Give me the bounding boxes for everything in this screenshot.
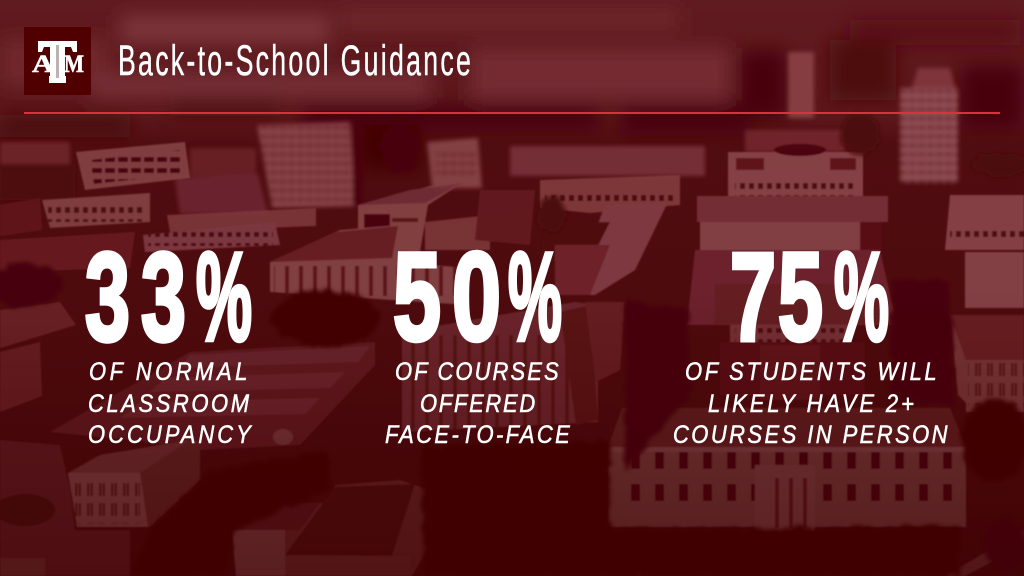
top centre campus hall bbox=[728, 152, 863, 198]
stat: 75 percent of students will likely have 2+ courses in person: % bbox=[834, 228, 889, 367]
caption bbox=[88, 358, 253, 448]
big number 33%: 3 bbox=[85, 228, 130, 367]
logo letter M: M bbox=[64, 51, 84, 78]
big number 33%: 3 bbox=[141, 228, 186, 367]
big number 75% bbox=[730, 228, 889, 367]
caption: OFFERED bbox=[420, 390, 535, 417]
distant blurred skyline bbox=[0, 8, 1024, 170]
logo T mark bbox=[38, 41, 77, 83]
lower central building bbox=[232, 480, 430, 576]
central-left blocks bbox=[358, 183, 462, 252]
stat: 33 percent of normal classroom occupancy bbox=[85, 228, 253, 448]
mid-ground buildings bbox=[0, 142, 1024, 576]
ground left bbox=[0, 440, 130, 576]
stat: 50 percent of courses offered face-to-face bbox=[385, 228, 570, 448]
caption bbox=[385, 358, 570, 448]
central-right blocks bbox=[540, 175, 680, 213]
logo letter A: A bbox=[32, 51, 54, 78]
big number 50% bbox=[393, 228, 562, 367]
lower-left long roof bbox=[50, 342, 375, 450]
blurred towers bbox=[0, 52, 958, 214]
paths bbox=[598, 540, 645, 576]
big number 33% bbox=[85, 228, 252, 367]
caption: OCCUPANCY bbox=[88, 421, 253, 448]
caption bbox=[673, 358, 948, 448]
stat: 50 percent of courses offered face-to-face: % bbox=[508, 228, 562, 367]
right side blocks bbox=[945, 195, 1024, 250]
caption: OF COURSES bbox=[395, 358, 559, 385]
cube building bbox=[68, 440, 200, 527]
big number 75%: 7 bbox=[730, 228, 776, 367]
big number 75%: 5 bbox=[778, 228, 823, 367]
big number 50%: 0 bbox=[452, 228, 501, 367]
big number 33%: % bbox=[196, 228, 252, 367]
academic building bbox=[608, 408, 966, 447]
caption: CLASSROOM bbox=[88, 390, 249, 417]
big number 50%: 5 bbox=[393, 228, 441, 367]
left cluster bbox=[76, 142, 190, 190]
caption: FACE-TO-FACE bbox=[385, 421, 570, 448]
stat: 75 percent of students will likely have 2+ courses in person bbox=[673, 228, 948, 448]
caption: OF NORMAL bbox=[89, 358, 247, 385]
header divider line bbox=[24, 112, 1000, 114]
title: Back-to-School Guidance bbox=[118, 37, 471, 85]
caption: OF STUDENTS WILL bbox=[685, 358, 937, 385]
caption: LIKELY HAVE 2+ bbox=[708, 390, 914, 417]
building behind 50% bbox=[402, 302, 598, 432]
logo: Texas A&M bbox=[24, 27, 91, 95]
caption: COURSES IN PERSON bbox=[673, 421, 948, 448]
